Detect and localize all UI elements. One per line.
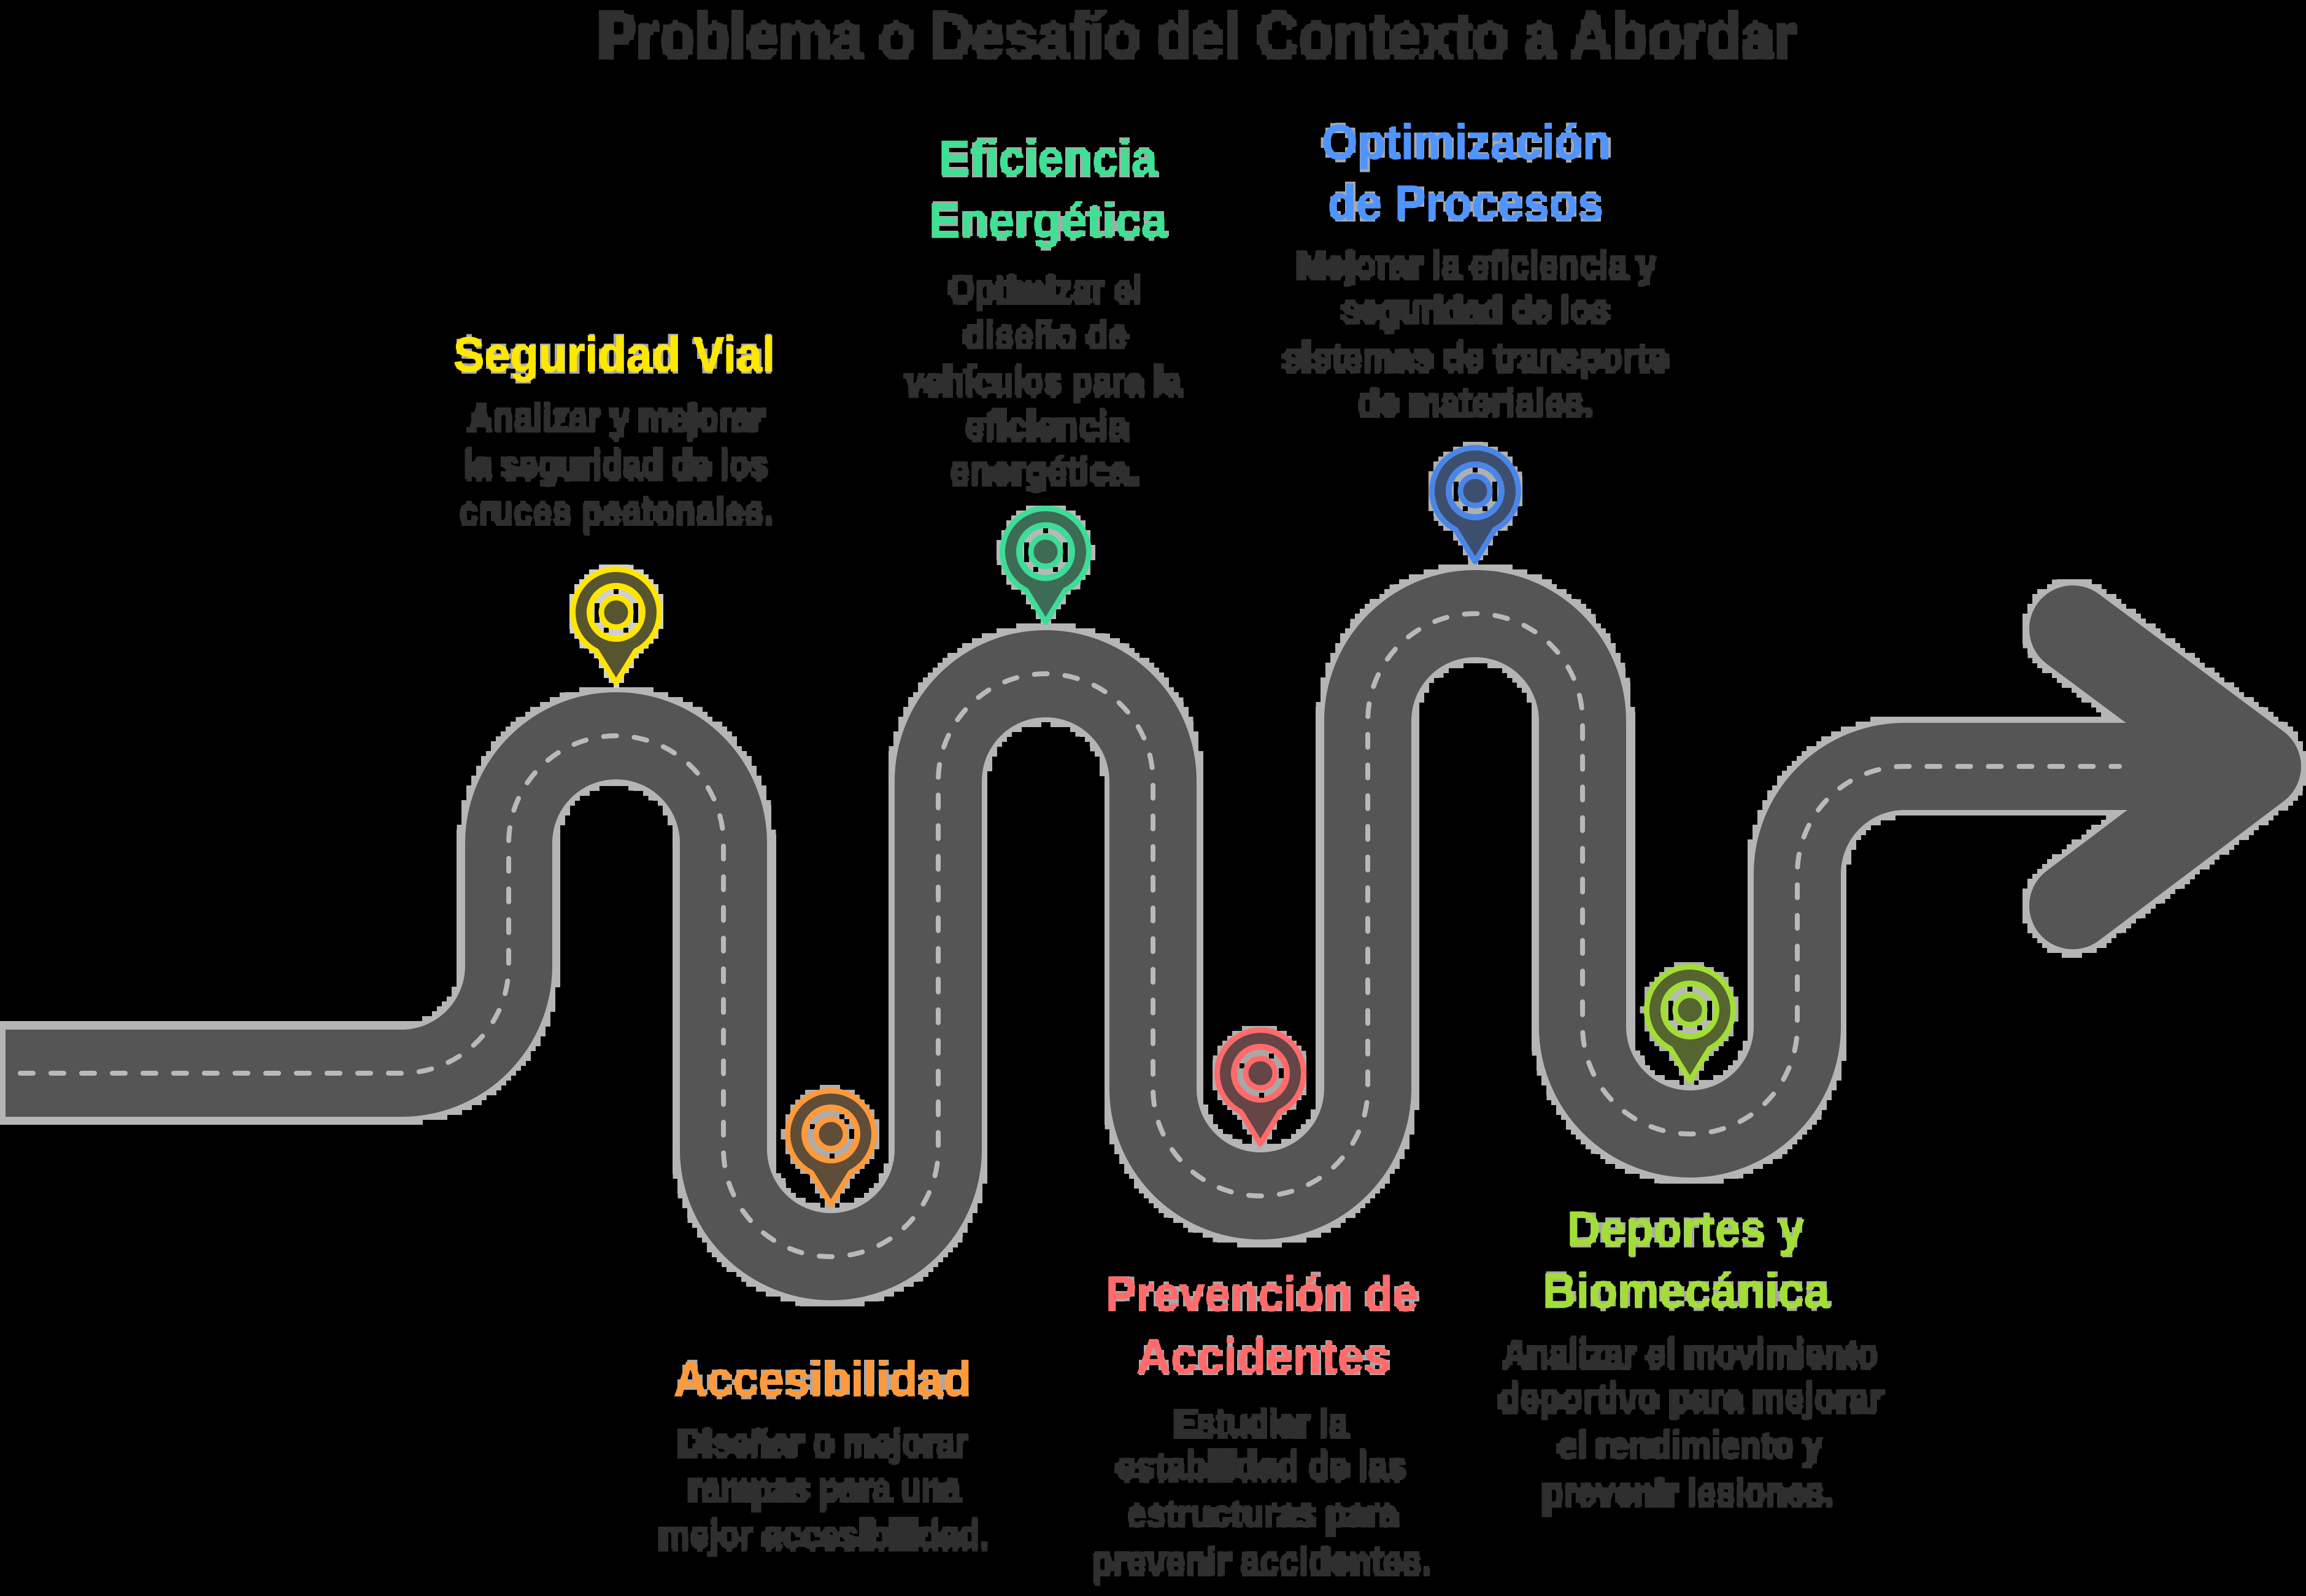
description: la seguridad de los [463,444,769,487]
description: eficiencia [965,405,1129,448]
heading: Accidentes [1136,1329,1390,1384]
heading: Eficiencia [939,131,1157,185]
description: sistemas de transporte [1282,336,1668,379]
road border [0,614,2258,1257]
winding road with arrow [0,614,2258,1257]
description: Estudiar la [1174,1402,1348,1445]
description: Analizar y mejorar [468,396,764,439]
heading: Prevención de [1106,1266,1418,1321]
description: diseño de [963,314,1128,357]
road surface [6,614,2258,1257]
description: deportivo para mejorar [1498,1377,1883,1420]
heading: Biomecánica [1543,1263,1830,1318]
description: estructuras para [1127,1492,1399,1535]
description [1498,1333,1883,1514]
dashed centre line [20,614,2119,1257]
panel: Accesibilidad [659,1091,989,1557]
panel: Eficiencia Energética [905,131,1182,622]
panel: Optimización de Procesos [1282,115,1668,561]
description: Mejorar la eficiencia y [1297,244,1656,287]
description: seguridad de los [1341,288,1610,331]
description: mejor accesibilidad. [659,1514,989,1557]
description: energética. [950,450,1139,493]
heading [1543,1201,1830,1318]
description: rampas para una [688,1467,962,1510]
heading [1106,1266,1418,1384]
icon: blue location pin [1432,448,1518,561]
description: Diseñar o mejorar [678,1422,968,1465]
heading: Seguridad Vial [453,327,775,382]
title: Problema o Desafío del Contexto a Abordar [598,0,1796,72]
description: Optimizar el [949,268,1142,311]
panel: Prevención de Accidentes [1092,1030,1432,1583]
description: cruces peatonales. [459,490,774,533]
heading [929,131,1167,248]
panel: Deportes y Biomecánica [1498,967,1883,1514]
description [905,268,1182,493]
description [659,1422,989,1557]
description: Analizar el movimiento [1503,1333,1878,1376]
heading [1322,115,1611,230]
heading: Deportes y [1567,1201,1804,1256]
icon: green location pin [1003,509,1089,622]
description: vehículos para la [905,360,1182,403]
icon: yellow location pin [573,569,659,683]
description [1092,1402,1432,1583]
description: estabilidad de las [1116,1445,1407,1488]
description [1282,244,1668,425]
heading: Optimización [1322,115,1611,169]
heading: de Procesos [1328,175,1603,230]
icon: lime location pin [1647,967,1733,1081]
description: prevenir accidentes. [1092,1540,1432,1583]
panel: Seguridad Vial [453,327,775,683]
heading: Accesibilidad [674,1352,971,1406]
icon: orange location pin [788,1091,874,1205]
description: el rendimiento y [1558,1424,1822,1467]
icon: red location pin [1217,1030,1303,1144]
description [459,396,774,533]
description: de materiales. [1357,382,1594,425]
heading: Energética [929,193,1167,248]
description: prevenir lesiones. [1543,1471,1834,1514]
